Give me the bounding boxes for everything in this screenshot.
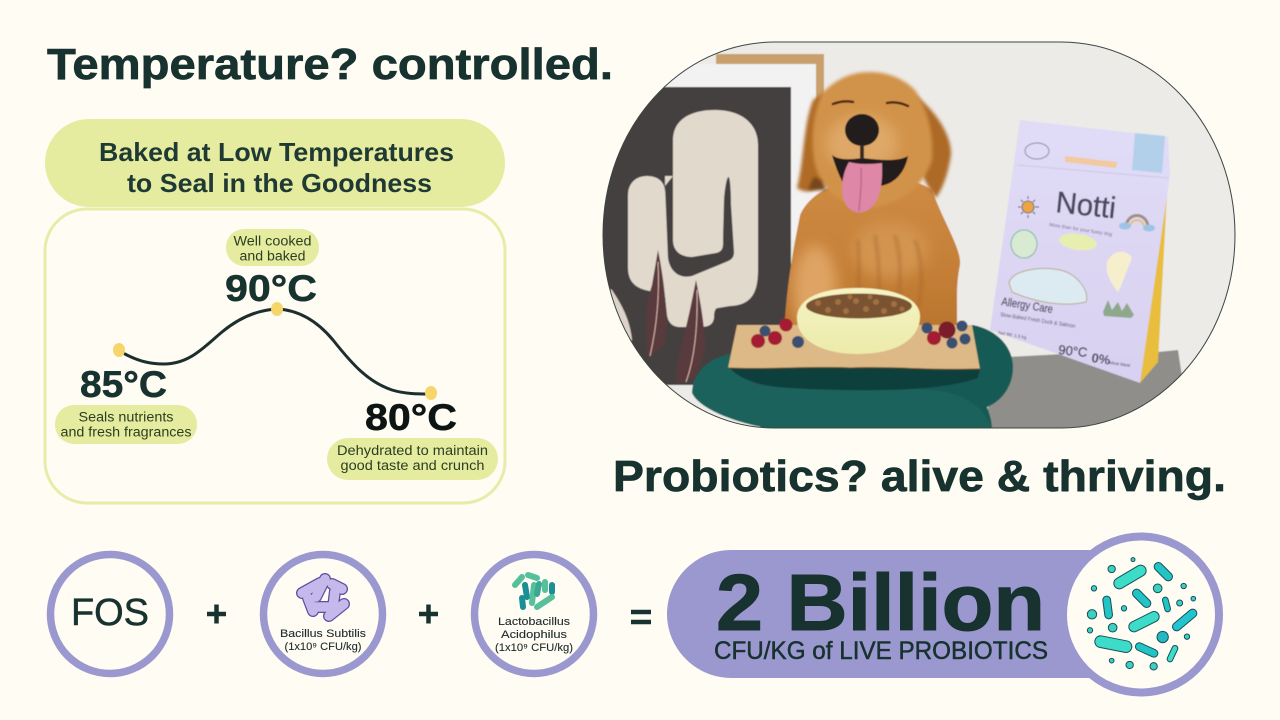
label: 80 degrees bbox=[327, 397, 498, 480]
dog nose bbox=[845, 114, 879, 146]
berries bbox=[751, 318, 970, 348]
wall bbox=[666, 42, 1234, 427]
bag dog doodle bbox=[1025, 143, 1049, 159]
plus sign bbox=[207, 604, 226, 624]
bag product name: Allergy Care bbox=[1001, 296, 1054, 316]
label: 85 degrees: Seals nutrients bbox=[78, 410, 174, 424]
framed artwork bbox=[600, 54, 824, 385]
bag sub name: Slow-Baked Fresh Duck & Salmon bbox=[1000, 312, 1076, 330]
ingredient circle: Lactobacillus Acidophilus: Acidophilus bbox=[501, 629, 568, 641]
bag speech bubble bbox=[1058, 233, 1098, 251]
label: 90 degrees bbox=[225, 229, 319, 309]
heading pill: baked at low temperatures: to Seal in the Goodness bbox=[127, 168, 432, 198]
ingredient circle: FOS: FOS bbox=[71, 592, 149, 634]
dog head bbox=[813, 72, 932, 208]
bag sun icon bbox=[1018, 196, 1039, 218]
label: 90 degrees: and baked bbox=[240, 248, 306, 264]
label: 80 degrees: Dehydrated to maintain bbox=[337, 443, 488, 458]
bag logo: Notti bbox=[1054, 186, 1117, 225]
stone stump bbox=[988, 350, 1190, 430]
ingredient circle: Bacillus Subtilis: Bacillus Subtilis bbox=[280, 628, 367, 640]
result pill: 2 billion CFU/KG bbox=[667, 550, 1100, 678]
bag net weight: Net Wt: 1.5 kg bbox=[998, 330, 1027, 340]
ingredient circle: Bacillus Subtilis bbox=[264, 554, 382, 674]
food bowl bbox=[797, 288, 920, 354]
bag ribbon bbox=[1065, 156, 1117, 168]
ingredient circle: Lactobacillus Acidophilus bbox=[474, 554, 594, 674]
icon: green lactobacillus cluster bbox=[515, 575, 552, 607]
label: 85 degrees: 85°C bbox=[80, 364, 167, 405]
plus sign bbox=[419, 604, 438, 624]
temperature curve line bbox=[125, 309, 430, 394]
result pill: 2 billion CFU/KG: CFU/KG of LIVE PROBIOTICS bbox=[714, 637, 1048, 665]
heading pill: baked at low temperatures bbox=[45, 119, 505, 207]
dog tongue bbox=[842, 162, 882, 213]
photo outline bbox=[603, 42, 1235, 428]
art streaks bbox=[646, 250, 667, 358]
icon: teal bacteria bbox=[1087, 558, 1196, 670]
label: 80 degrees: good taste and crunch bbox=[340, 458, 484, 473]
ingredient circle: Bacillus Subtilis: (1x10⁹ CFU/kg) bbox=[284, 641, 362, 653]
ingredient circle: Lactobacillus Acidophilus: (1x10⁹ CFU/kg) bbox=[495, 642, 573, 654]
bag tagline: More than for your fussy dog bbox=[1049, 222, 1113, 238]
photo: dog with bowl and product bag bbox=[600, 40, 1240, 430]
product bag bbox=[990, 120, 1170, 383]
bag dog illustration bbox=[1107, 252, 1132, 292]
wooden board bbox=[728, 325, 980, 369]
dog mouth bbox=[832, 155, 908, 186]
bag pool illustration bbox=[1009, 269, 1087, 304]
equals sign bbox=[631, 612, 651, 622]
label: 80 degrees: 80°C bbox=[365, 397, 457, 438]
label: 85 degrees bbox=[55, 364, 197, 444]
result pill: 2 billion CFU/KG: 2 Billion bbox=[716, 558, 1045, 647]
label: 90 degrees: 90°C bbox=[225, 268, 317, 309]
bag 90 degree claim: 90°C bbox=[1058, 342, 1088, 360]
title: temperature controlled: Temperature? controlled. bbox=[47, 40, 613, 89]
label: 85 degrees: and fresh fragrances bbox=[60, 424, 192, 440]
probiotic circle with bacteria bbox=[1063, 536, 1219, 692]
ingredient circle: Lactobacillus Acidophilus: Lactobacillus bbox=[498, 616, 571, 628]
bag 0 percent claim: 0% bbox=[1091, 350, 1112, 368]
green pouf bbox=[692, 325, 1013, 430]
dog bbox=[784, 72, 960, 340]
label: 90 degrees: Well cooked bbox=[234, 234, 312, 248]
bag grass bbox=[1103, 300, 1134, 318]
ingredient circle: FOS bbox=[50, 554, 170, 674]
bag rainbow icon bbox=[1119, 216, 1155, 232]
heading: probiotics alive and thriving: Probiotics? alive & thriving. bbox=[613, 452, 1226, 501]
curve point markers bbox=[113, 302, 437, 400]
bag meat meal note: Meat Meal bbox=[1109, 360, 1130, 368]
bag badge bbox=[1011, 230, 1037, 258]
icon: purple bacillus cluster bbox=[302, 579, 344, 616]
panel: temperature curve bbox=[45, 209, 505, 503]
dog body bbox=[784, 182, 961, 326]
dog eyes bbox=[833, 101, 908, 106]
dog ears bbox=[794, 92, 824, 194]
heading pill: baked at low temperatures: Baked at Low Temperatures bbox=[99, 137, 454, 167]
bag tag bbox=[1132, 133, 1165, 173]
